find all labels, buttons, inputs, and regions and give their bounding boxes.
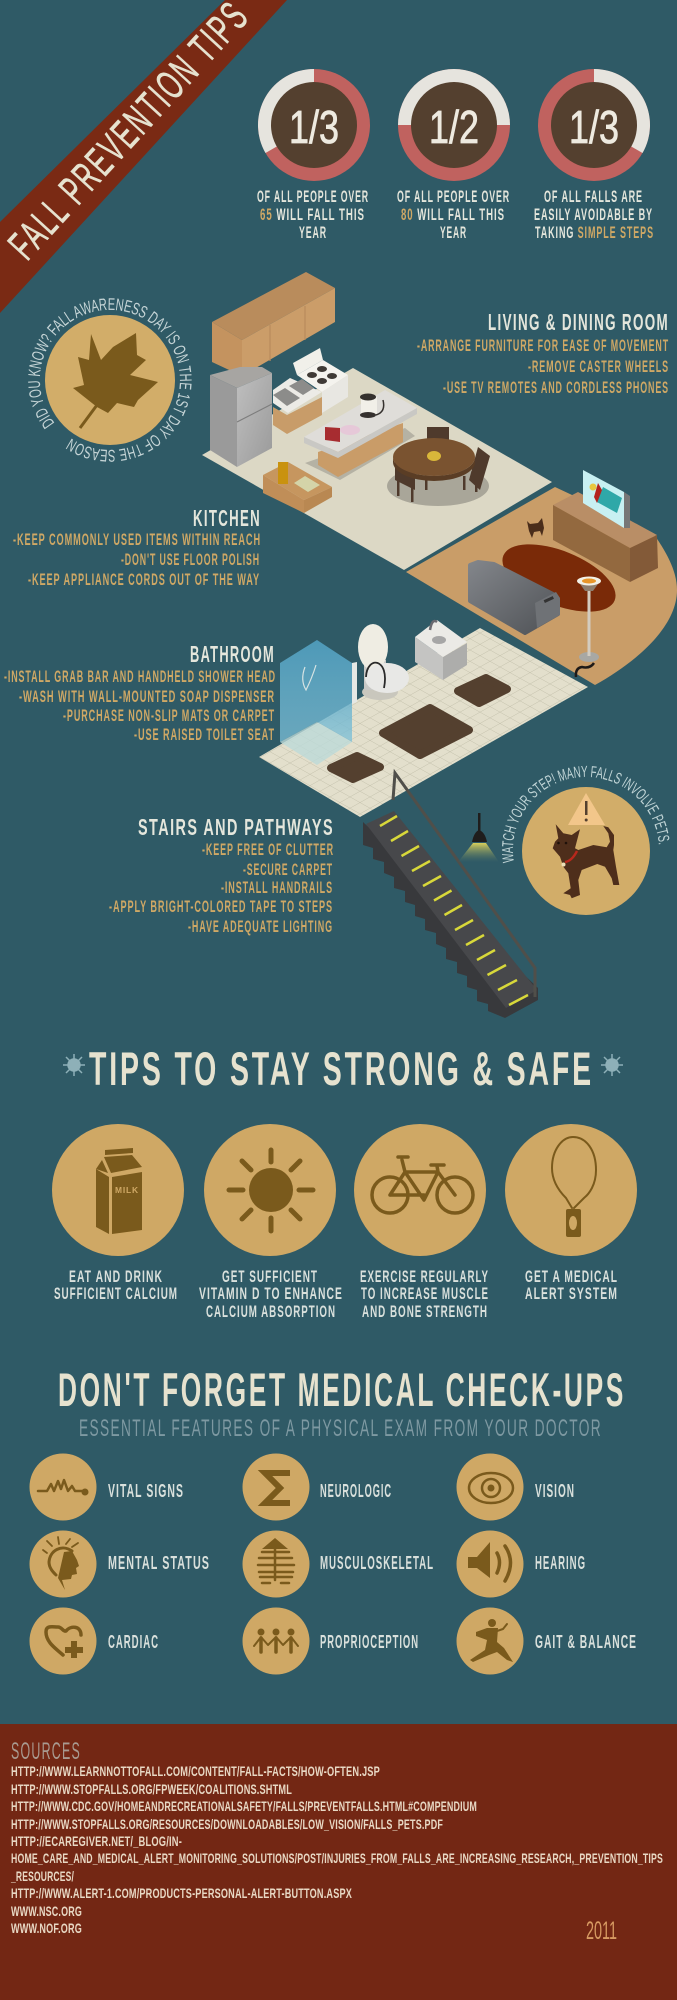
- refrigerator: [210, 367, 272, 467]
- floor plan: living room: [406, 470, 677, 685]
- tip: vitamin d: [199, 1124, 343, 1321]
- tip: vitamin d: CALCIUM ABSORPTION: [206, 1302, 336, 1321]
- tip: vitamin d: VITAMIN D TO ENHANCE: [199, 1284, 343, 1303]
- television: [583, 470, 630, 528]
- source list: HTTP://WWW.STOPFALLS.ORG/FPWEEK/COALITIONS.SHTML: [11, 1781, 292, 1797]
- kettle: [360, 394, 384, 418]
- text block: kitchen: KITCHEN: [193, 505, 261, 531]
- source list: HTTP://ECAREGIVER.NET/_BLOG/IN-: [11, 1833, 182, 1849]
- statistic: 1/2 over 80: OF ALL PEOPLE OVER: [397, 187, 510, 206]
- medallion: watch your step: [502, 766, 670, 915]
- sources heading: SOURCES: [11, 1738, 81, 1765]
- icon: milk carton: MILK: [115, 1186, 139, 1195]
- icon: dog: [553, 824, 619, 898]
- handrail: [393, 773, 535, 997]
- small dog: [527, 518, 544, 538]
- check-up: vital signs: [30, 1454, 184, 1520]
- source list: [10, 1763, 663, 1936]
- icon: three people: [254, 1628, 298, 1652]
- source list: HTTP://WWW.ALERT-1.COM/PRODUCTS-PERSONAL-ALERT-BUTTON.ASPX: [11, 1885, 352, 1901]
- check-up: vision: [456, 1454, 575, 1520]
- icon: right sun: [601, 1054, 623, 1076]
- source list: HTTP://WWW.LEARNNOTTOFALL.COM/CONTENT/FALL-FACTS/HOW-OFTEN.JSP: [11, 1763, 380, 1779]
- icon: ceiling lamp: [458, 813, 499, 862]
- medallion: fall awareness day: DID YOU KNOW? FALL AWARENESS DAY IS ON THE 1ST DAY OF THE SEASON: [28, 298, 192, 462]
- title banner: [0, 0, 287, 313]
- text block: kitchen: -DON'T USE FLOOR POLISH: [121, 550, 260, 569]
- source list: WWW.NOF.ORG: [11, 1920, 82, 1936]
- check-up: mental status: [30, 1530, 210, 1598]
- stair treads: [366, 811, 537, 1008]
- check-up: musculoskeletal: MUSCULOSKELETAL: [320, 1553, 434, 1573]
- statistic: 1/3 over 65: 1/3: [289, 101, 339, 153]
- sofa: [470, 562, 560, 633]
- stove: [293, 348, 348, 413]
- text block: living and dining room: [417, 309, 669, 397]
- check-up: musculoskeletal: [242, 1530, 434, 1598]
- statistic: 1/3 avoidable: 1/3: [569, 101, 619, 153]
- check-up: cardiac: [30, 1608, 159, 1674]
- text block: stairs and pathways: [109, 814, 334, 936]
- tile floor: [259, 628, 588, 817]
- statistic: 1/2 over 80: YEAR: [440, 223, 467, 242]
- icon: running figure: [470, 1619, 513, 1662]
- toilet: [358, 624, 409, 700]
- statistic: 1/2 over 80: [397, 69, 510, 242]
- icon: bicycle: [372, 1157, 473, 1213]
- shower: [280, 640, 357, 765]
- check-up: neurologic: [242, 1454, 392, 1520]
- tip: exercise: AND BONE STRENGTH: [362, 1302, 488, 1321]
- tip: calcium: EAT AND DRINK: [69, 1267, 163, 1286]
- bath mats: [331, 678, 507, 779]
- kitchen island: [304, 390, 417, 477]
- tip: medical alert: [505, 1124, 637, 1303]
- icon: sun: [229, 1150, 313, 1231]
- icon: alert pendant: [552, 1137, 596, 1237]
- check-up: gait and balance: [456, 1608, 637, 1674]
- source list: WWW.NSC.ORG: [11, 1903, 82, 1919]
- sources panel: [0, 1724, 677, 2000]
- source list: _RESOURCES/: [10, 1868, 74, 1884]
- medallion: watch your step: WATCH YOUR STEP! MANY FALLS INVOLVE PETS.: [502, 766, 670, 864]
- text block: stairs and pathways: -INSTALL HANDRAILS: [221, 878, 333, 897]
- living room floor: [406, 487, 677, 685]
- statistic: 1/3 over 65: 65 WILL FALL THIS: [260, 205, 365, 224]
- heading: medical check-ups: [58, 1363, 626, 1442]
- check-up: vital signs: VITAL SIGNS: [108, 1481, 184, 1501]
- text block: bathroom: -WASH WITH WALL-MOUNTED SOAP DISPENSER: [19, 687, 275, 706]
- statistic: 1/3 over 65: YEAR: [299, 223, 327, 242]
- check-up: neurologic: NEUROLOGIC: [320, 1481, 392, 1501]
- island floor shadow: [305, 428, 415, 480]
- tv stand: [553, 492, 658, 582]
- text block: stairs and pathways: -KEEP FREE OF CLUTTER: [202, 840, 334, 859]
- year: 2011: [586, 1917, 617, 1945]
- text block: bathroom: -USE RAISED TOILET SEAT: [134, 725, 275, 744]
- tip: exercise: EXERCISE REGULARLY: [360, 1267, 489, 1286]
- tip: medical alert: ALERT SYSTEM: [525, 1284, 618, 1303]
- storage box: [263, 462, 332, 513]
- check-up: proprioception: [242, 1608, 419, 1674]
- floor plan: bathroom: [259, 620, 588, 817]
- icon: milk carton: [96, 1148, 142, 1234]
- warning sign: [568, 793, 605, 825]
- statistic: 1/3 avoidable: [534, 69, 654, 242]
- tip: exercise: [354, 1124, 489, 1321]
- staircase: [363, 773, 538, 1018]
- text block: stairs and pathways: -APPLY BRIGHT-COLORED TAPE TO STEPS: [109, 897, 333, 916]
- icon: heart and cross: [46, 1627, 83, 1658]
- rug: [493, 530, 625, 626]
- text block: stairs and pathways: -HAVE ADEQUATE LIGHTING: [188, 917, 333, 936]
- source list: HTTP://WWW.STOPFALLS.ORG/RESOURCES/DOWNLOADABLES/LOW_VISION/FALLS_PETS.PDF: [11, 1816, 443, 1832]
- upper cabinets: [212, 272, 335, 376]
- text block: bathroom: -PURCHASE NON-SLIP MATS OR CARPET: [63, 706, 275, 725]
- check-up: mental status: MENTAL STATUS: [108, 1553, 210, 1573]
- check-up: cardiac: CARDIAC: [108, 1632, 159, 1652]
- check-up: hearing: [456, 1530, 586, 1598]
- check-up: proprioception: PROPRIOCEPTION: [320, 1632, 419, 1652]
- check-up: hearing: HEARING: [535, 1553, 586, 1573]
- statistic: 1/2 over 80: 80 WILL FALL THIS: [401, 205, 505, 224]
- dining rug: [387, 466, 489, 506]
- dining table: [393, 438, 475, 481]
- text block: bathroom: BATHROOM: [190, 641, 275, 667]
- bathroom sink: [415, 620, 467, 680]
- floor plan: kitchen and dining: [202, 272, 552, 570]
- kitchen floor: [202, 368, 552, 570]
- sink counter: [273, 378, 322, 434]
- tip: medical alert: GET A MEDICAL: [525, 1267, 618, 1286]
- text block: kitchen: [13, 505, 261, 589]
- text block: bathroom: [4, 641, 276, 744]
- tape strips: [380, 816, 528, 1005]
- check-up: vision: VISION: [535, 1481, 575, 1501]
- tip: calcium: [52, 1124, 184, 1303]
- text block: bathroom: -INSTALL GRAB BAR AND HANDHELD SHOWER HEAD: [4, 667, 276, 686]
- text block: kitchen: -KEEP COMMONLY USED ITEMS WITHIN REACH: [13, 530, 261, 549]
- floor lamp: [576, 576, 601, 677]
- icon: maple leaf: [73, 333, 158, 428]
- text block: stairs and pathways: STAIRS AND PATHWAYS: [138, 814, 334, 840]
- statistic: 1/3 over 65: [257, 69, 370, 242]
- tip: exercise: TO INCREASE MUSCLE: [361, 1284, 489, 1303]
- tip: calcium: SUFFICIENT CALCIUM: [54, 1284, 178, 1303]
- icon: lightbulb head: [43, 1537, 79, 1590]
- tip: vitamin d: GET SUFFICIENT: [222, 1267, 318, 1286]
- text block: kitchen: -KEEP APPLIANCE CORDS OUT OF THE WAY: [28, 570, 260, 589]
- statistic: 1/2 over 80: 1/2: [429, 101, 479, 153]
- icon: left sun: [63, 1054, 85, 1076]
- text block: stairs and pathways: -SECURE CARPET: [243, 860, 333, 879]
- stair side: [363, 822, 538, 1018]
- dining chairs and legs: [395, 427, 490, 502]
- statistic: 1/3 over 65: OF ALL PEOPLE OVER: [257, 187, 369, 206]
